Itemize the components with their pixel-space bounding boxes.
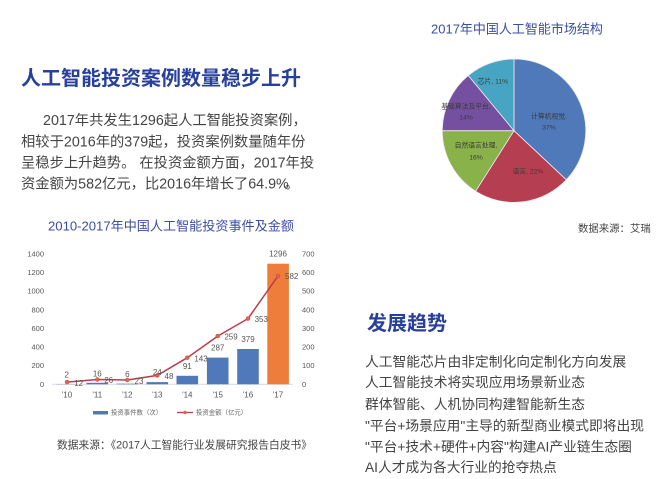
data labels: 1296 bbox=[269, 250, 287, 258]
left axis labels: 1000 bbox=[27, 287, 44, 296]
pie labels: 37% bbox=[542, 124, 556, 132]
data labels: 23 bbox=[135, 377, 144, 386]
list: development trends: "平台+场景应用"主导的新型商业模式即将出现 bbox=[365, 418, 644, 434]
x axis labels: '10 bbox=[62, 390, 73, 400]
legend bbox=[93, 407, 247, 416]
x axis labels: '13 bbox=[152, 390, 163, 400]
pie labels: 14% bbox=[459, 114, 473, 122]
list: development trends bbox=[365, 354, 644, 475]
legend: 投资金额（亿元） bbox=[196, 407, 247, 416]
list: development trends: "平台+技术+硬件+内容"构建AI产业链生态圈 bbox=[365, 438, 632, 454]
source note: white paper: 数据来源：《2017人工智能行业发展研究报告白皮书》 bbox=[57, 438, 312, 452]
source note: iResearch: 数据来源：艾瑞 bbox=[578, 222, 651, 235]
data labels: 12 bbox=[74, 379, 84, 388]
heading: development trends: 发展趋势 bbox=[367, 312, 447, 335]
x axis labels: '15 bbox=[212, 390, 223, 400]
x axis labels: '11 bbox=[92, 390, 103, 400]
pie labels: 计算机视觉, bbox=[531, 112, 567, 120]
x axis labels: '17 bbox=[273, 390, 284, 400]
x axis labels: '16 bbox=[243, 390, 254, 400]
left axis labels: 0 bbox=[40, 380, 44, 389]
data labels: 353 bbox=[255, 315, 269, 324]
list: development trends: 人工智能芯片由非定制化向定制化方向发展 bbox=[365, 354, 627, 370]
data labels: 26 bbox=[104, 376, 114, 385]
pie labels: 自然语言处理, bbox=[455, 140, 497, 150]
data labels: 48 bbox=[165, 372, 174, 381]
list: development trends: 群体智能、人机协同构建智能新生态 bbox=[365, 397, 585, 412]
data labels: 143 bbox=[194, 354, 208, 364]
left axis labels: 400 bbox=[31, 342, 44, 352]
data labels: 259 bbox=[224, 332, 238, 342]
data labels: 379 bbox=[241, 335, 255, 344]
legend: 投资事件数（次） bbox=[111, 407, 162, 416]
right axis labels: 400 bbox=[302, 305, 315, 314]
right axis labels: 100 bbox=[302, 361, 315, 370]
left axis labels: 1400 bbox=[27, 250, 44, 258]
right axis labels: 600 bbox=[302, 268, 315, 277]
bars: investment events bbox=[56, 264, 289, 384]
left axis labels bbox=[27, 250, 44, 389]
right axis labels: 300 bbox=[302, 324, 315, 333]
title: investment cases: 人工智能投资案例数量稳步上升 bbox=[21, 67, 301, 90]
left axis labels: 200 bbox=[31, 361, 44, 370]
data labels bbox=[64, 250, 299, 388]
data labels: 582 bbox=[285, 272, 299, 281]
pie labels: 16% bbox=[469, 154, 483, 162]
x axis labels bbox=[62, 390, 284, 400]
text block: investment summary: 呈稳步上升趋势。 在投资金额方面，2017年投 bbox=[21, 154, 314, 172]
pie labels: 语言, 22% bbox=[513, 166, 543, 176]
pie labels: 芯片, 11% bbox=[478, 76, 508, 86]
pie labels: 基础算法及平台, bbox=[441, 102, 491, 110]
right axis labels: 200 bbox=[302, 342, 315, 352]
chart title: market structure: 2017年中国人工智能市场结构 bbox=[431, 22, 603, 36]
right axis labels: 0 bbox=[302, 380, 306, 389]
data labels: 91 bbox=[183, 362, 192, 371]
x axis labels: '12 bbox=[122, 390, 133, 400]
line: investment amount bbox=[65, 274, 280, 384]
data labels: 287 bbox=[211, 344, 225, 352]
x axis labels: '14 bbox=[182, 390, 193, 400]
data labels: 16 bbox=[93, 370, 102, 378]
pie chart: market structure bbox=[441, 59, 586, 202]
data labels: 24 bbox=[153, 368, 162, 377]
combo chart: investment events and amount bbox=[27, 250, 315, 416]
text block: investment summary: 相较于2016年的379起，投资案例数量随年份 bbox=[21, 132, 305, 150]
left axis labels: 600 bbox=[31, 324, 44, 333]
right axis labels: 500 bbox=[302, 287, 315, 296]
right axis labels bbox=[302, 250, 315, 389]
left axis labels: 800 bbox=[31, 305, 44, 314]
text block: investment summary bbox=[21, 111, 314, 192]
data labels: 2 bbox=[64, 370, 69, 380]
pie labels bbox=[441, 76, 567, 176]
left axis labels: 1200 bbox=[27, 268, 44, 277]
text block: investment summary: 2017年共发生1296起人工智能投资案例， bbox=[43, 111, 307, 129]
chart title: investment events and amount: 2010-2017年中国人工智能投资事件及金额 bbox=[48, 218, 294, 234]
list: development trends: AI人才成为各大行业的抢夺热点 bbox=[365, 459, 557, 475]
right axis labels: 700 bbox=[302, 250, 315, 258]
text block: investment summary: 资金额为582亿元，比2016年增长了64.9%。 bbox=[21, 176, 299, 192]
data labels: 6 bbox=[125, 370, 130, 379]
list: development trends: 人工智能技术将实现应用场景新业态 bbox=[365, 374, 585, 390]
